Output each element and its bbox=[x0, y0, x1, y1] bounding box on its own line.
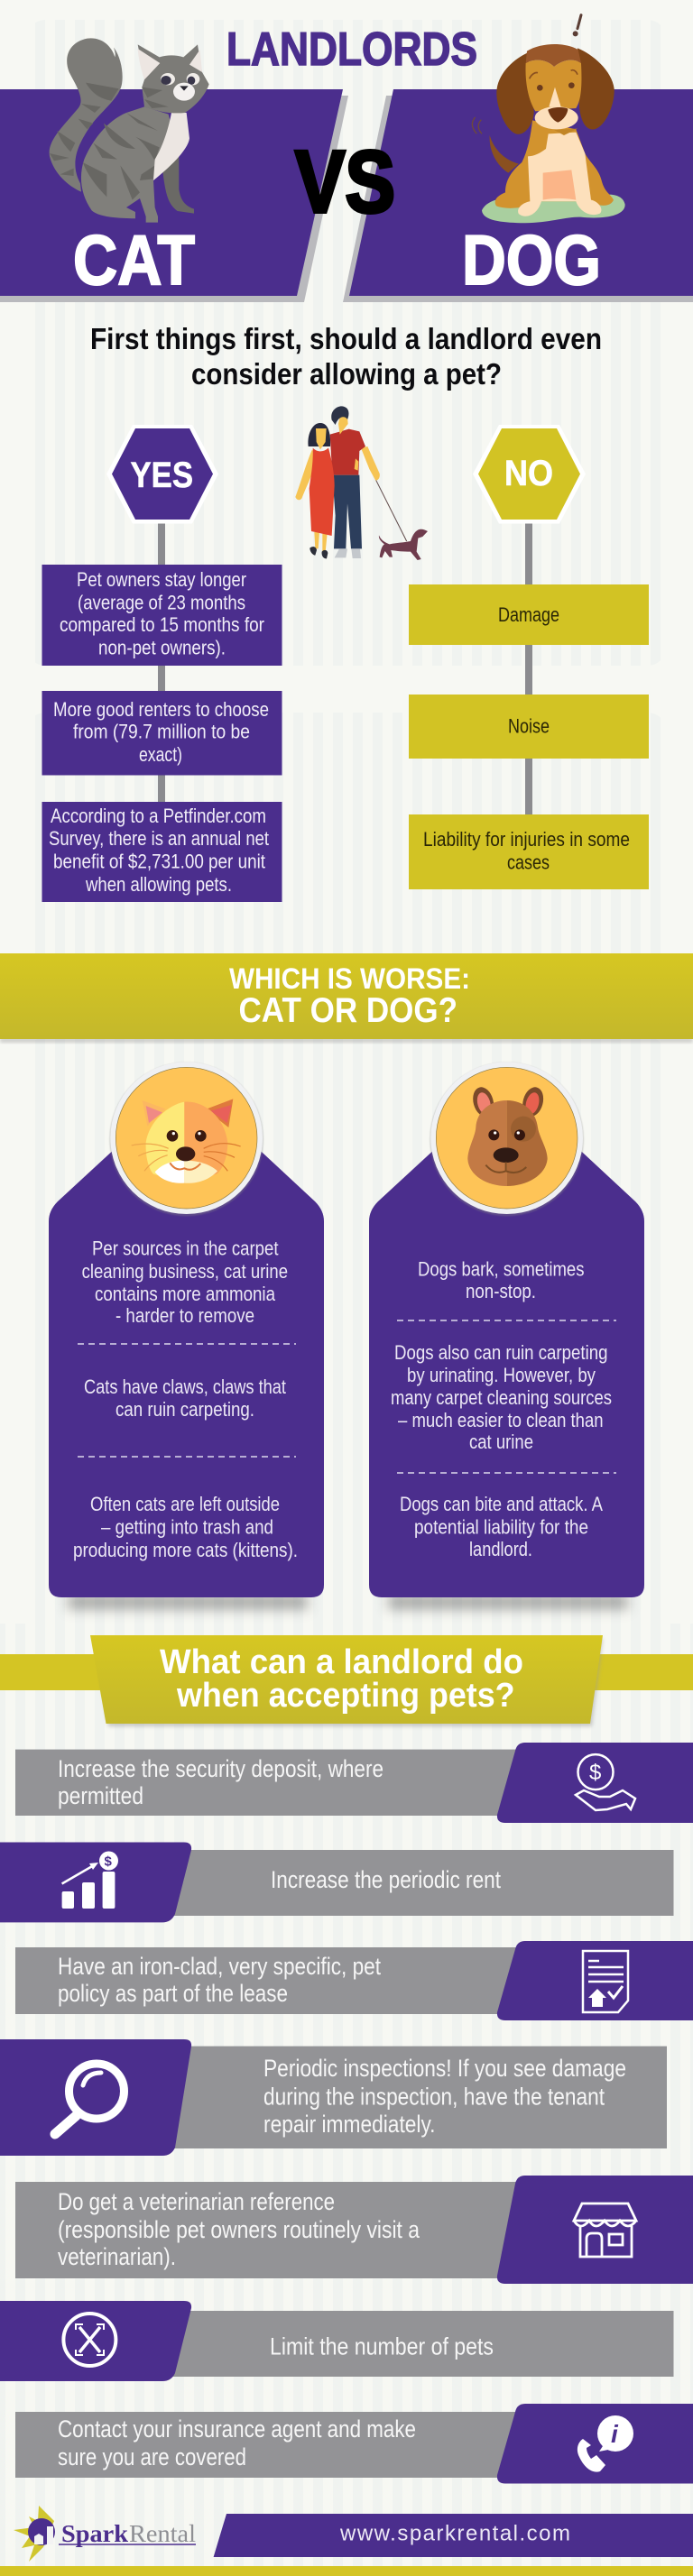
row: security deposit: permitted bbox=[58, 1782, 143, 1809]
text box: more renters: exact) bbox=[139, 743, 182, 766]
logo: SparkRental bbox=[14, 2506, 196, 2562]
heading: first things first question: First things first, should a landlord even bbox=[90, 322, 602, 355]
icon: coin over hand bbox=[576, 1754, 635, 1810]
cat card text: - harder to remove bbox=[116, 1304, 254, 1327]
dog card text: Dogs also can ruin carpeting bbox=[394, 1341, 608, 1364]
icon: rising bars and coin: $ bbox=[105, 1854, 112, 1869]
icon: limit circle bbox=[63, 2314, 116, 2366]
text box: stay longer: (average of 23 months bbox=[78, 592, 245, 613]
heading band: which is worse: WHICH IS WORSE: bbox=[229, 962, 470, 995]
row: periodic rent: Increase the periodic rent bbox=[271, 1866, 501, 1893]
dog card text bbox=[391, 1257, 616, 1560]
row: inspections: during the inspection, have the tenant bbox=[263, 2084, 605, 2111]
text box: net benefit: when allowing pets. bbox=[85, 873, 232, 896]
text box: more renters bbox=[42, 691, 282, 776]
row: security deposit: Increase the security deposit, where bbox=[58, 1755, 383, 1782]
panel: cat banner bbox=[0, 89, 348, 302]
row: inspections: Periodic inspections! If you see damage bbox=[263, 2055, 626, 2082]
text box: net benefit bbox=[42, 802, 282, 902]
dog card text: by urinating. However, by bbox=[407, 1364, 596, 1386]
dog card text: – much easier to clean than bbox=[398, 1409, 604, 1431]
row: inspections bbox=[0, 2039, 667, 2156]
text box: liability: cases bbox=[507, 851, 550, 874]
panel: yes column bbox=[42, 425, 282, 902]
row: pet policy: Have an iron-clad, very specific, pet bbox=[58, 1953, 381, 1980]
icon: phone with info bubble bbox=[578, 2415, 633, 2472]
heading band: which is worse: CAT OR DOG? bbox=[238, 991, 457, 1030]
icon: storefront bbox=[574, 2203, 636, 2257]
row: security deposit bbox=[15, 1743, 693, 1823]
icon: phone with info bubble: i bbox=[611, 2420, 619, 2448]
row: insurance agent bbox=[15, 2404, 693, 2484]
text box: noise: Noise bbox=[508, 714, 550, 738]
text box: damage: Damage bbox=[498, 603, 559, 626]
footer banner: website: www.sparkrental.com bbox=[339, 2521, 570, 2545]
cat card text: – getting into trash and bbox=[101, 1515, 273, 1539]
icon: rising bars and coin bbox=[62, 1851, 118, 1909]
row: pet policy bbox=[15, 1941, 693, 2020]
dog card text: potential liability for the bbox=[414, 1515, 588, 1539]
heading: CAT: CAT bbox=[73, 220, 195, 299]
text box: liability bbox=[409, 814, 649, 889]
row: veterinarian reference: Do get a veterinarian reference bbox=[58, 2188, 335, 2215]
heading: DOG: DOG bbox=[462, 220, 601, 299]
row: veterinarian reference: veterinarian). bbox=[58, 2243, 176, 2270]
text box: stay longer: Pet owners stay longer bbox=[77, 568, 246, 591]
icon: beagle dog on mat bbox=[472, 15, 625, 223]
dog card text: non-stop. bbox=[466, 1280, 536, 1302]
dog card text: landlord. bbox=[469, 1538, 532, 1560]
heading: first things first question: consider allowing a pet? bbox=[191, 357, 502, 391]
yes hexagon: YES bbox=[130, 455, 193, 495]
icon: coin over hand: $ bbox=[589, 1761, 601, 1785]
logo: SparkRental: Rental bbox=[129, 2520, 196, 2547]
no hexagon: NO bbox=[504, 454, 553, 493]
logo: SparkRental: Spark bbox=[61, 2520, 128, 2547]
title: LANDLORDS: LANDLORDS bbox=[226, 23, 477, 76]
row: insurance agent: sure you are covered bbox=[58, 2443, 246, 2470]
row: pet policy: policy as part of the lease bbox=[58, 1980, 288, 2007]
row: periodic rent bbox=[0, 1842, 673, 1922]
text box: net benefit: According to a Petfinder.com bbox=[51, 805, 266, 827]
row: veterinarian reference: (responsible pet owners routinely visit a bbox=[58, 2216, 420, 2243]
text box: net benefit: benefit of $2,731.00 per unit bbox=[53, 850, 266, 873]
cat card text: producing more cats (kittens). bbox=[73, 1539, 298, 1561]
cat card text: cleaning business, cat urine bbox=[82, 1260, 288, 1283]
no hexagon bbox=[473, 425, 586, 523]
panel: cat card bbox=[49, 1062, 324, 1609]
dog card text: many carpet cleaning sources bbox=[391, 1386, 612, 1409]
illustration: couple walking dachshund bbox=[295, 406, 428, 560]
cat card text: Cats have claws, claws that bbox=[84, 1375, 287, 1398]
panel: no column bbox=[409, 425, 649, 889]
icon: dog face badge bbox=[430, 1062, 584, 1216]
text box: more renters: More good renters to choose bbox=[53, 698, 269, 721]
text box: more renters: from (79.7 million to be bbox=[73, 721, 250, 743]
text box: damage bbox=[409, 584, 649, 645]
row: insurance agent: Contact your insurance agent and make bbox=[58, 2415, 416, 2443]
row: inspections: repair immediately. bbox=[263, 2111, 435, 2138]
row: limit pets: Limit the number of pets bbox=[270, 2333, 494, 2360]
heading ribbon: what can a landlord do: when accepting pets? bbox=[176, 1677, 515, 1715]
text box: liability: Liability for injuries in some bbox=[423, 828, 630, 851]
text box: stay longer: compared to 15 months for bbox=[60, 613, 264, 636]
row: veterinarian reference bbox=[15, 2176, 693, 2284]
dog card text: Dogs can bite and attack. A bbox=[400, 1493, 603, 1515]
icon: cat face badge bbox=[109, 1062, 263, 1216]
icon: magnifying glass bbox=[55, 2064, 125, 2134]
heading ribbon: what can a landlord do: What can a landlord do bbox=[160, 1643, 523, 1681]
text box: stay longer: non-pet owners). bbox=[98, 637, 226, 658]
footer banner: website bbox=[214, 2514, 693, 2557]
dog card text: Dogs bark, sometimes bbox=[418, 1257, 585, 1281]
text box: noise bbox=[409, 695, 649, 759]
dog card text: cat urine bbox=[469, 1431, 533, 1453]
row: limit pets bbox=[0, 2301, 673, 2381]
heading: VS: VS bbox=[295, 133, 395, 231]
heading: first things first question bbox=[90, 322, 602, 391]
cat card text: Per sources in the carpet bbox=[92, 1237, 279, 1259]
heading ribbon: what can a landlord do bbox=[0, 1635, 693, 1726]
icon: sun with buildings bbox=[14, 2506, 55, 2562]
panel: dog card bbox=[369, 1062, 644, 1609]
cat card text: contains more ammonia bbox=[95, 1283, 275, 1305]
panel: dog banner bbox=[343, 89, 693, 302]
heading band: which is worse bbox=[0, 953, 693, 1043]
yes hexagon bbox=[106, 425, 218, 523]
icon: grey tabby cat bbox=[50, 38, 209, 223]
cat card text: Often cats are left outside bbox=[90, 1493, 280, 1515]
cat card text: can ruin carpeting. bbox=[116, 1398, 254, 1421]
cat card text bbox=[73, 1237, 298, 1561]
text box: stay longer bbox=[42, 565, 282, 666]
icon: lease document bbox=[583, 1951, 628, 2012]
text box: net benefit: Survey, there is an annual net bbox=[49, 827, 270, 850]
